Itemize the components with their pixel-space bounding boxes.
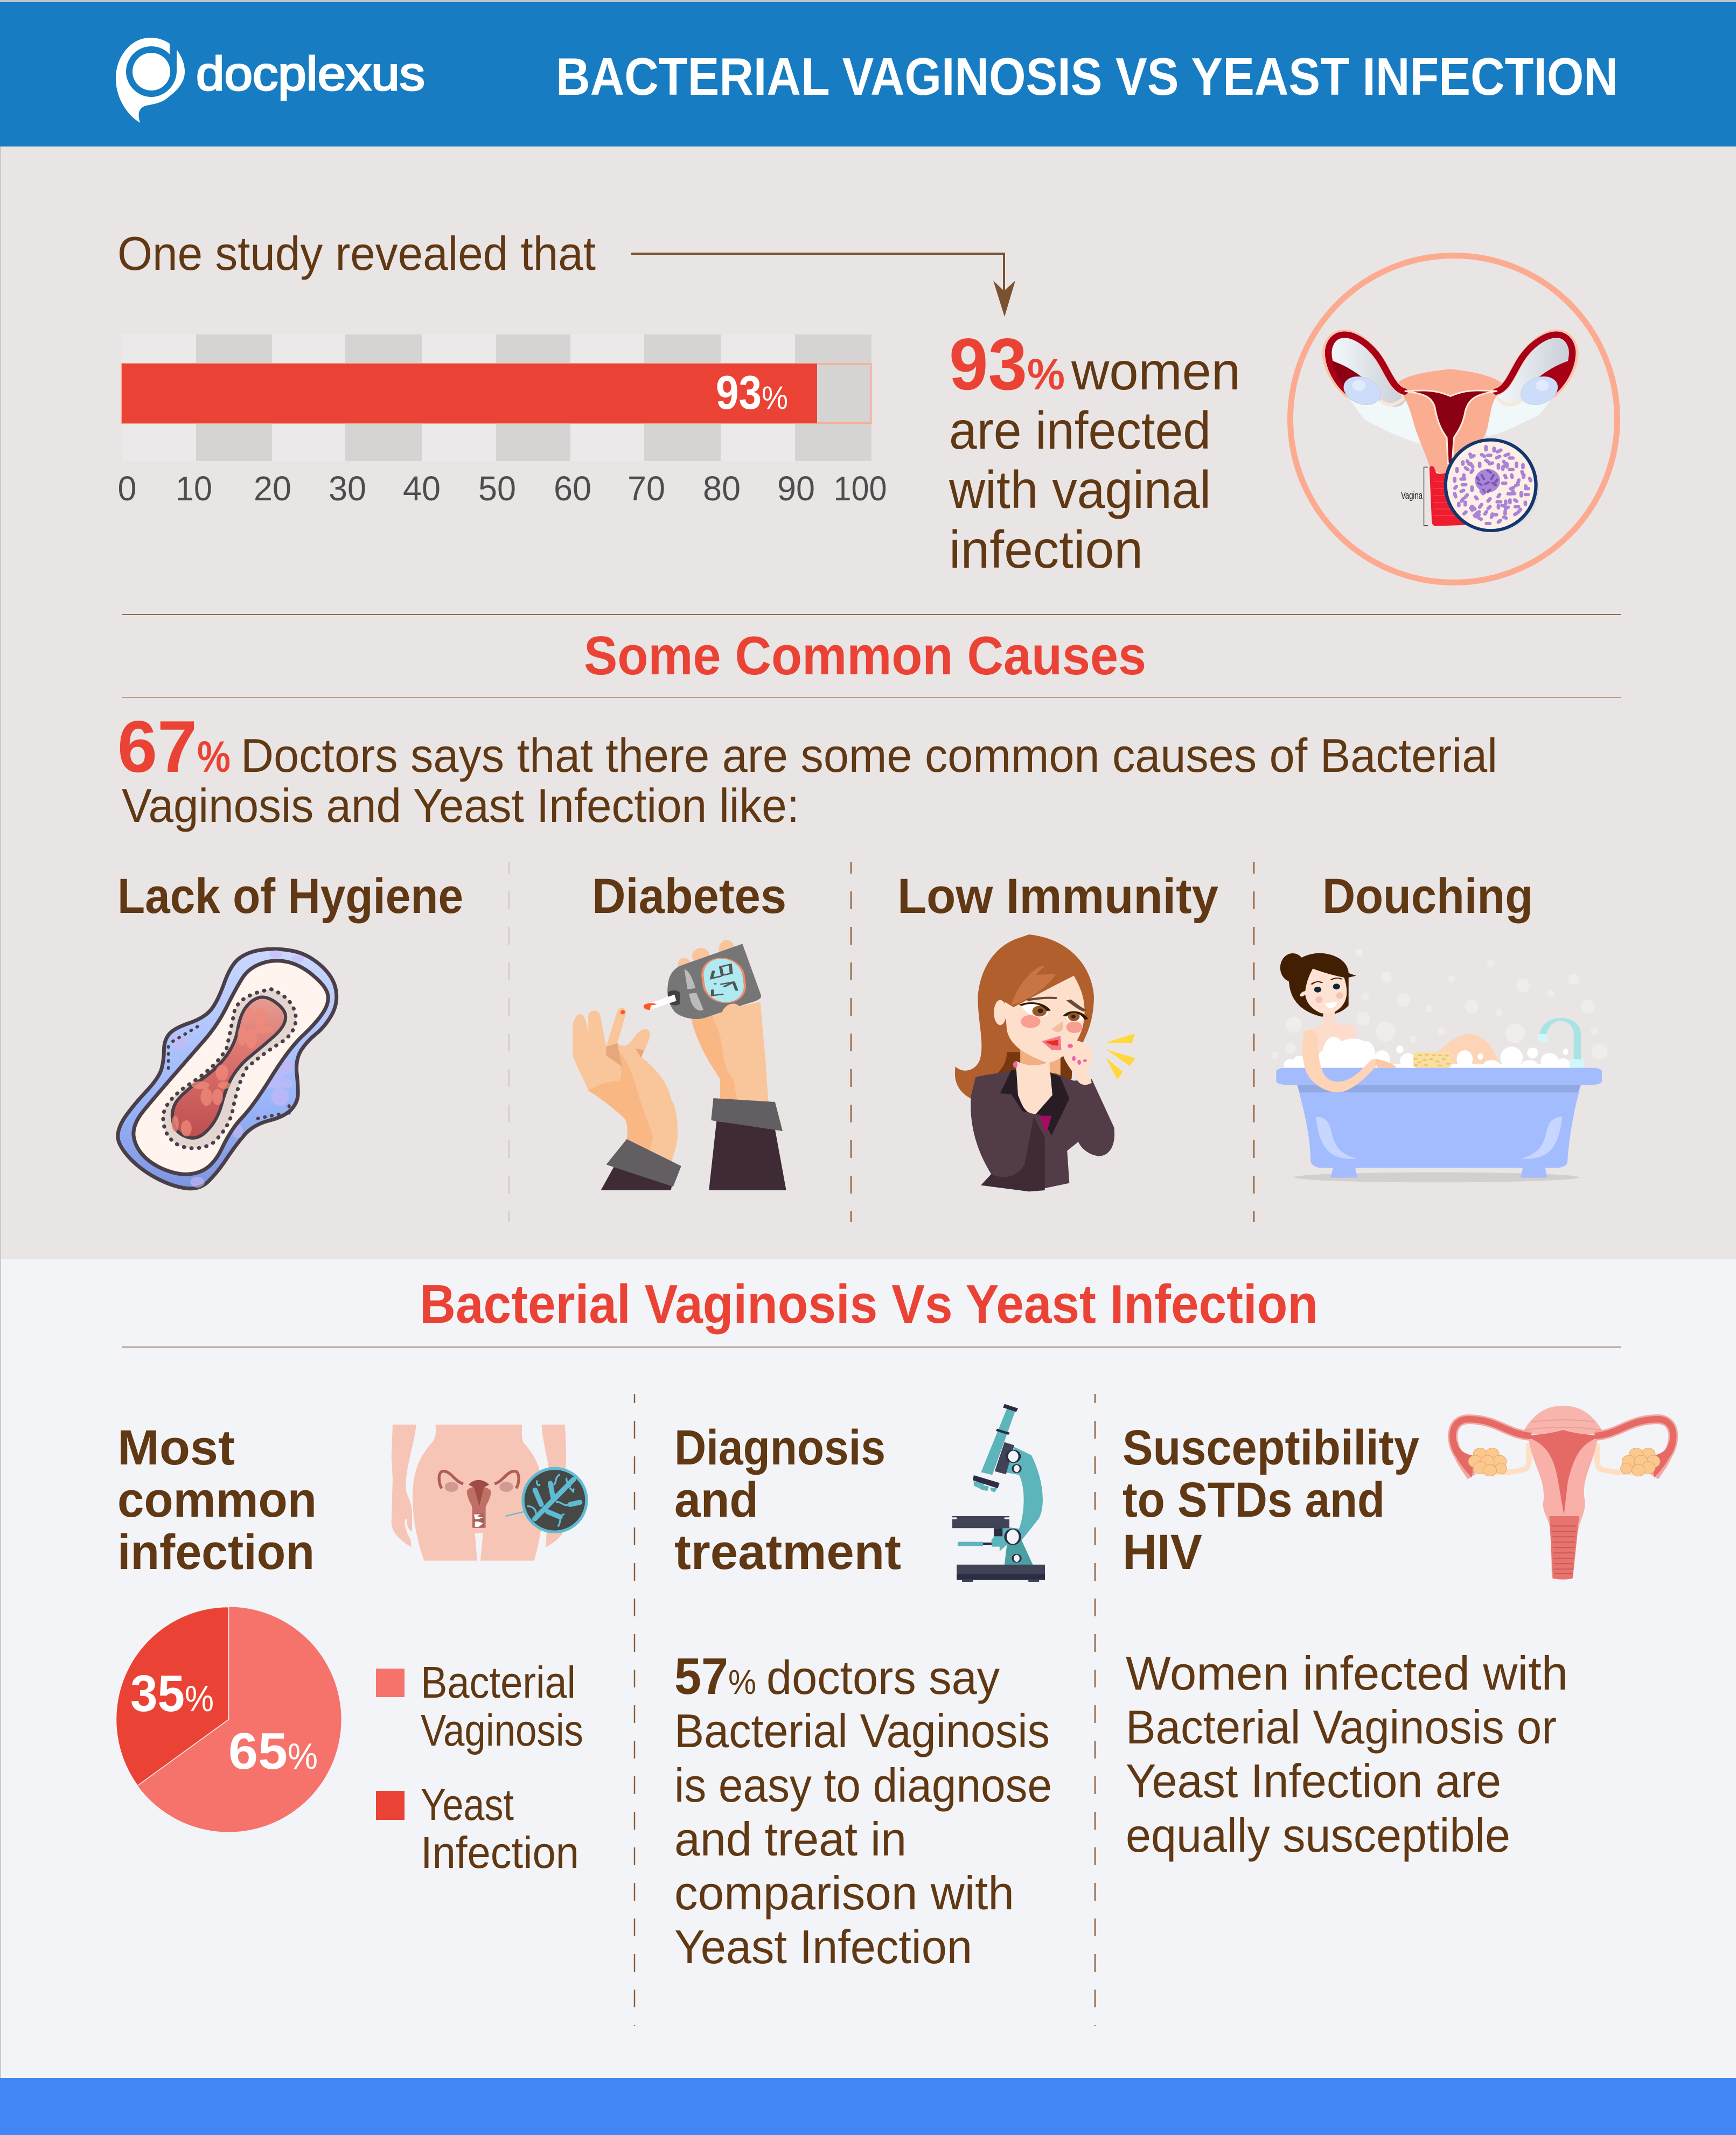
icon: sanitary pad <box>118 949 337 1189</box>
legend: Infection <box>421 1827 579 1878</box>
uterine cavity <box>1405 390 1497 464</box>
text: 57 percent doctors: doctors say <box>766 1651 1000 1704</box>
face <box>1005 976 1085 1063</box>
pie label: 65%: 65 <box>228 1722 288 1780</box>
text: 57 percent doctors: and treat in <box>674 1812 907 1866</box>
statement: 67 percent of doctors: Vaginosis and Yeast Infection like: <box>122 779 799 832</box>
heading: susceptibility: to STDs and <box>1123 1473 1385 1527</box>
ovaries <box>1339 371 1385 410</box>
chart axis labels: 100 <box>834 469 887 508</box>
right hand <box>691 1002 768 1102</box>
statement: 67 percent of doctors <box>117 706 1497 832</box>
text: 57 percent doctors: % <box>728 1663 756 1701</box>
fallopian tubes <box>1453 1419 1531 1477</box>
chart axis labels: 0 <box>117 469 137 508</box>
statistic: 93% women infected: 93 <box>949 323 1027 405</box>
vagina <box>1430 466 1469 526</box>
legend: Bacterial <box>421 1657 576 1707</box>
icon: logo speech bubble <box>116 38 185 123</box>
statement: 67 percent of doctors: % <box>197 732 231 782</box>
faucet <box>1543 1020 1577 1061</box>
text: 57 percent doctors: comparison with <box>674 1866 1014 1920</box>
icon: coughing woman <box>955 934 1135 1191</box>
pie label: 35%: 35 <box>130 1665 185 1722</box>
chart axis labels: 90 <box>777 469 815 508</box>
chart axis labels: 40 <box>403 469 441 508</box>
text: 57 percent doctors: Bacterial Vaginosis <box>674 1704 1050 1757</box>
pie label: 65%: % <box>288 1736 318 1777</box>
header band <box>0 0 1736 146</box>
left sleeve <box>601 1167 672 1190</box>
mouth <box>1042 1036 1061 1050</box>
vagina label: Vagina <box>1401 490 1423 501</box>
icon: woman in bathtub <box>1271 949 1608 1182</box>
panel: most common infection <box>116 1420 587 1878</box>
small uterus <box>467 1487 491 1528</box>
text: study intro: One study revealed that <box>117 227 596 280</box>
dashed column separators: comparison <box>635 1394 1095 2026</box>
bather torso <box>1310 1024 1357 1059</box>
magnified bacteria <box>1446 440 1539 532</box>
text: susceptibility statement <box>1126 1646 1568 1862</box>
tube walls <box>1326 333 1574 393</box>
title: BACTERIAL VAGINOSIS VS YEAST INFECTION <box>556 47 1618 106</box>
heading: susceptibility <box>1123 1420 1419 1580</box>
uterine cavity <box>1522 1430 1605 1515</box>
heading: diagnosis and treatment: and <box>674 1473 758 1527</box>
heading: most common infection: infection <box>117 1525 315 1580</box>
meter digits <box>712 965 737 995</box>
heading: susceptibility: Susceptibility <box>1123 1420 1419 1475</box>
chart axis labels: 70 <box>628 469 665 508</box>
heading: diagnosis and treatment: Diagnosis <box>674 1420 886 1475</box>
heading: low immunity: Low Immunity <box>897 869 1218 924</box>
statement: 67 percent of doctors: 67 <box>117 706 197 787</box>
legend: Yeast <box>421 1780 514 1830</box>
chart axis labels: 10 <box>176 469 212 508</box>
fallopian tube interiors <box>1329 338 1406 407</box>
chart axis labels: 50 <box>478 469 516 508</box>
statistic: 93% women infected: women <box>1071 341 1240 401</box>
text: 57 percent doctors: Yeast Infection <box>674 1920 972 1973</box>
fingers behind meter <box>678 940 735 972</box>
text: 57 percent doctors: 57 <box>674 1648 728 1705</box>
panel: diagnosis and treatment <box>674 1404 1052 1973</box>
shadow <box>1294 1173 1579 1182</box>
right sleeve <box>709 1121 786 1190</box>
heading: lack of hygiene: Lack of Hygiene <box>117 869 463 924</box>
bather arm <box>1302 1030 1379 1092</box>
heading: most common infection: common <box>117 1473 317 1527</box>
broad ligament <box>1350 396 1421 444</box>
knee <box>1433 1034 1499 1068</box>
uterine wall <box>1399 369 1502 475</box>
icon: microscope <box>952 1404 1045 1582</box>
statement: 67 percent of doctors: Doctors says that there are some common causes of Bacterial <box>241 729 1497 782</box>
uterus body <box>1529 1437 1597 1579</box>
floating bubbles <box>1271 949 1608 1060</box>
panel: susceptibility to STDs and HIV <box>1123 1406 1675 1862</box>
chart axis labels: 60 <box>554 469 591 508</box>
text: 57 percent doctors <box>674 1648 1052 1973</box>
foam <box>1284 1037 1572 1072</box>
text: susceptibility statement: Yeast Infection are <box>1126 1754 1501 1808</box>
heading: most common infection: Most <box>117 1420 235 1475</box>
bather head <box>1280 953 1305 982</box>
icon: hands with glucose meter <box>573 940 786 1190</box>
icon: pelvis with fungus magnified <box>392 1425 587 1561</box>
text: susceptibility statement: equally susceptible <box>1126 1809 1510 1862</box>
heading: susceptibility: HIV <box>1123 1525 1202 1580</box>
panel: diabetes <box>573 869 786 1190</box>
cough marks <box>1106 1034 1135 1079</box>
arrow: study to statistic <box>631 254 1015 317</box>
bar value label: % <box>762 380 788 416</box>
heading: bacterial vaginosis vs yeast infection: Bacterial Vaginosis Vs Yeast Infection <box>420 1274 1318 1335</box>
jacket <box>971 1070 1114 1191</box>
back hair <box>971 1041 1074 1099</box>
chart axis labels: 80 <box>703 469 741 508</box>
glucose meter <box>667 944 761 1019</box>
vagina canal <box>1549 1516 1579 1579</box>
logo: docplexus <box>116 38 425 123</box>
bar value label: 93 <box>716 366 762 419</box>
text: susceptibility statement: Women infected with <box>1126 1646 1568 1700</box>
heading: diagnosis and treatment <box>674 1420 901 1580</box>
fundus <box>1522 1406 1605 1434</box>
vagina bracket <box>1424 467 1428 526</box>
chart axis labels: 30 <box>329 469 366 508</box>
heading: some common causes: Some Common Causes <box>584 626 1146 686</box>
heading: diabetes: Diabetes <box>592 869 786 924</box>
heading: douching: Douching <box>1322 869 1533 924</box>
heading: diagnosis and treatment: treatment <box>674 1525 901 1580</box>
sponge <box>1413 1052 1451 1068</box>
chart axis labels: 20 <box>254 469 291 508</box>
panel: lack of hygiene <box>117 869 463 1189</box>
hands <box>1016 1061 1052 1114</box>
panel: low immunity <box>897 869 1218 1191</box>
legend: Vaginosis <box>421 1705 583 1755</box>
text: 57 percent doctors: is easy to diagnose <box>674 1759 1052 1812</box>
footer band <box>0 2078 1736 2135</box>
bar chart: 93 percent <box>117 334 887 508</box>
heading: most common infection <box>117 1420 317 1580</box>
statistic: 93% women infected: infection <box>949 520 1143 579</box>
icon: uterus <box>1451 1406 1675 1579</box>
pie label: 35% <box>130 1665 214 1722</box>
ovary: right <box>1621 1448 1660 1476</box>
statistic: 93% women infected: with vaginal <box>949 460 1211 519</box>
left hand <box>573 1008 678 1163</box>
illustration: uterus with bacteria in circle <box>1291 255 1617 583</box>
pie label: 65% <box>228 1722 318 1780</box>
bathtub <box>1276 1068 1602 1085</box>
legend <box>376 1657 583 1878</box>
eyes and brows <box>1021 1003 1048 1017</box>
logo wordmark: docplexus <box>196 47 425 100</box>
dashed column separators: causes <box>509 862 1254 1222</box>
connector <box>505 1512 524 1516</box>
neck <box>1020 1049 1061 1077</box>
chart axis labels <box>117 469 887 508</box>
statistic: 93% women infected: are infected <box>949 401 1211 460</box>
test strip <box>649 995 677 1009</box>
pie chart <box>116 1607 341 1832</box>
pie label: 35%: % <box>185 1678 214 1719</box>
text: susceptibility statement: Bacterial Vaginosis or <box>1126 1700 1557 1754</box>
panel: douching <box>1271 869 1608 1182</box>
ovary: left <box>1468 1448 1507 1476</box>
statistic: 93% women infected: % <box>1027 350 1065 399</box>
divider line <box>122 614 1621 615</box>
magnifier <box>523 1468 587 1532</box>
statistic: 93% women infected <box>949 323 1240 579</box>
